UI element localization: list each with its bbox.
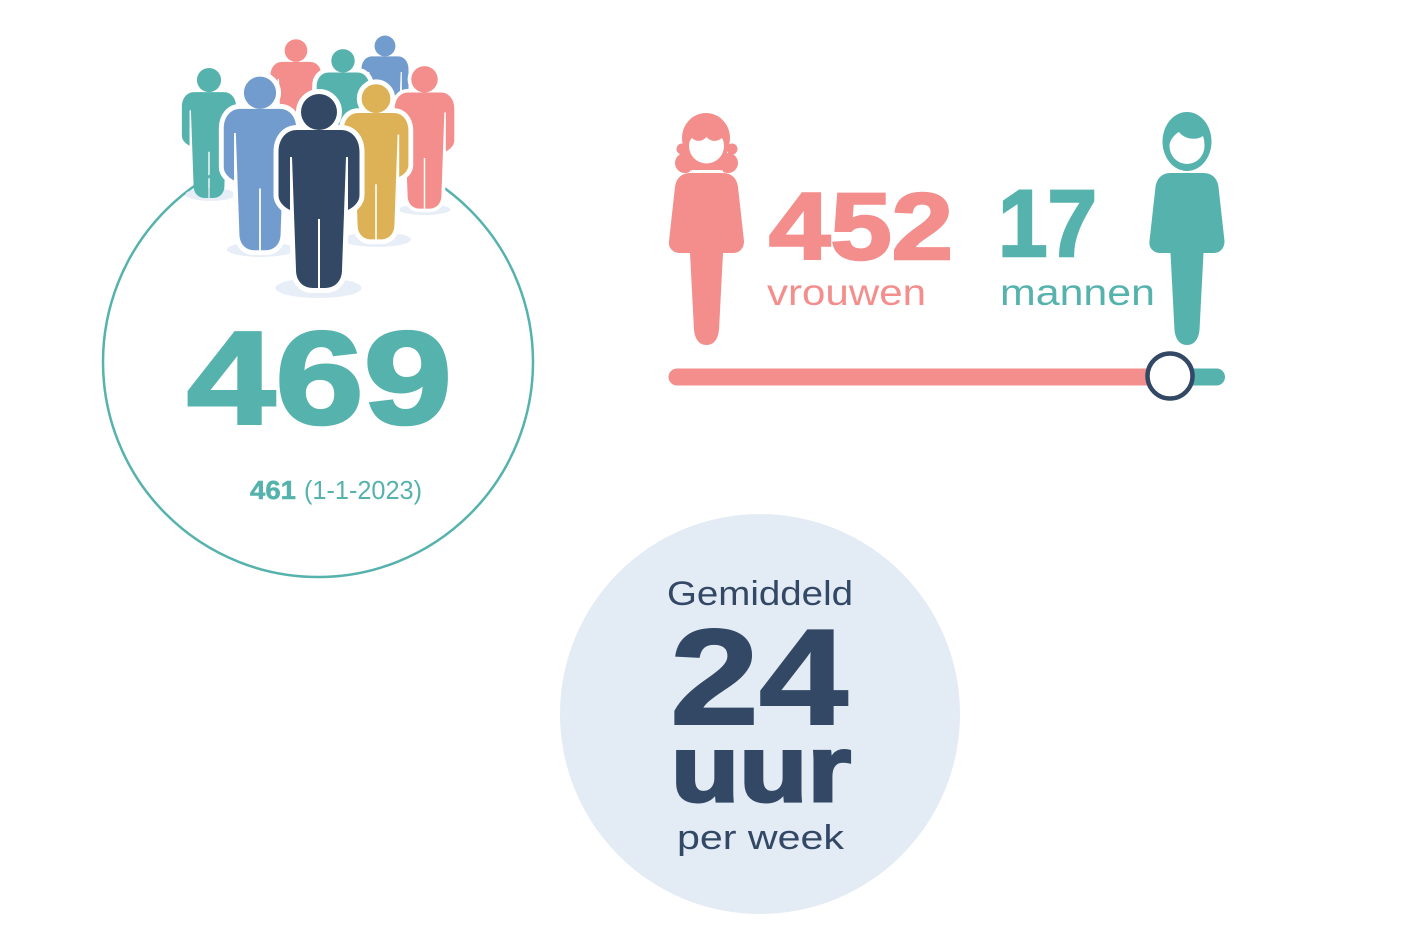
label: mannen: mannen — [1000, 272, 1155, 313]
panel: average hours circle — [560, 514, 960, 914]
number: 17: 17 — [998, 171, 1097, 277]
label: uur: uur — [671, 716, 851, 821]
ratio bar — [668, 354, 1225, 398]
circle outline — [103, 147, 533, 577]
icon: group of people — [182, 36, 454, 298]
label: per week: per week — [677, 819, 845, 857]
previous count: 461 (1-1-2023): (1-1-2023) — [304, 475, 422, 505]
icon: man — [1149, 112, 1224, 345]
number: 469: 469 — [187, 304, 452, 452]
panel: total count circle — [103, 147, 533, 577]
number: 24: 24 — [670, 601, 848, 753]
label: vrouwen: vrouwen — [767, 272, 926, 313]
icon: woman — [669, 113, 744, 345]
number: 452: 452 — [769, 174, 953, 280]
previous count: 461 (1-1-2023): 461 — [250, 475, 296, 505]
panel: gender split — [668, 112, 1225, 398]
label: Gemiddeld: Gemiddeld — [667, 575, 853, 613]
